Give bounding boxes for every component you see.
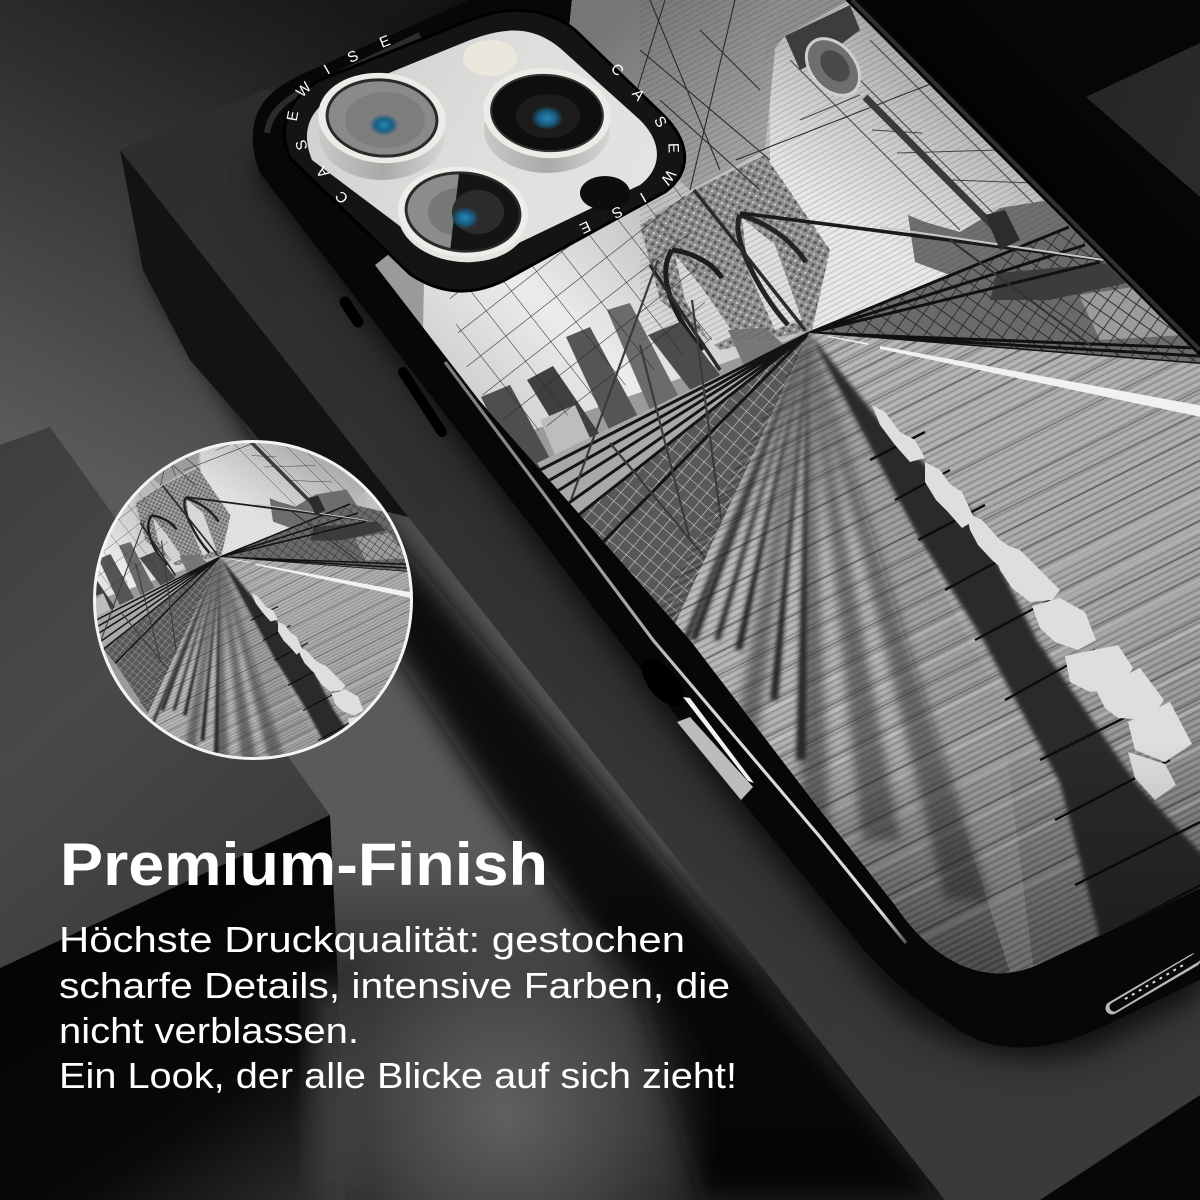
right block top face: [1086, 43, 1200, 197]
brand text right: S: [609, 202, 625, 222]
soft edge of front face: [312, 985, 354, 1200]
brand text right: W: [656, 166, 679, 188]
brand text right: S: [650, 113, 670, 131]
brand text right: [577, 60, 682, 237]
brand text right: C: [607, 60, 627, 80]
phone case: [253, 0, 1200, 1150]
brand text right: I: [637, 189, 649, 205]
lens right: [479, 63, 615, 173]
brand text left: E: [284, 110, 302, 122]
lower-left block top: [0, 427, 330, 968]
title: Premium-Finish: [60, 831, 548, 898]
lens left: [314, 68, 450, 180]
camera plate: [307, 31, 657, 260]
screen photo: bridge: [375, 0, 1200, 974]
case lip: [267, 35, 420, 133]
side button upper: [345, 302, 358, 322]
flash: [463, 40, 517, 76]
glossy edge highlight: [445, 362, 906, 943]
brand text right: E: [664, 143, 682, 153]
phone wide shadow: [255, 0, 1200, 1057]
block shaded side, crisp top corner: [120, 150, 420, 520]
brand text left: I: [321, 62, 333, 78]
brand text left: E: [377, 32, 393, 52]
body text: [59, 919, 737, 1096]
camera module: [267, 10, 685, 291]
detail magnifier circle: [93, 440, 413, 760]
chrome action button: [677, 697, 754, 800]
lens bottom: [398, 167, 528, 262]
brand text left: S: [345, 47, 361, 67]
lidar: [580, 176, 630, 210]
right rim: [852, 0, 1200, 350]
side hole: [634, 653, 692, 713]
phone shadow: [255, 0, 1200, 1057]
brand text right: A: [628, 86, 648, 104]
brand text left: [284, 32, 393, 207]
brand text left: W: [293, 78, 316, 101]
brand text left: A: [313, 163, 333, 181]
brand text right: E: [577, 217, 593, 237]
lower-left block front: [0, 815, 345, 1200]
floor glow: [290, 900, 720, 1200]
brand text left: C: [332, 187, 352, 207]
block shaded side: [140, 230, 945, 1200]
camera ring: [285, 10, 685, 291]
brand text left: S: [292, 138, 312, 152]
charging port: [1112, 958, 1196, 1008]
body text: Höchste Druckqualität: gestochen: [59, 919, 685, 960]
body text: nicht verblassen.: [59, 1010, 359, 1051]
side button middle: [403, 372, 442, 432]
body text: Ein Look, der alle Blicke auf sich zieht!: [59, 1055, 737, 1096]
body text: scharfe Details, intensive Farben, die: [59, 965, 730, 1006]
